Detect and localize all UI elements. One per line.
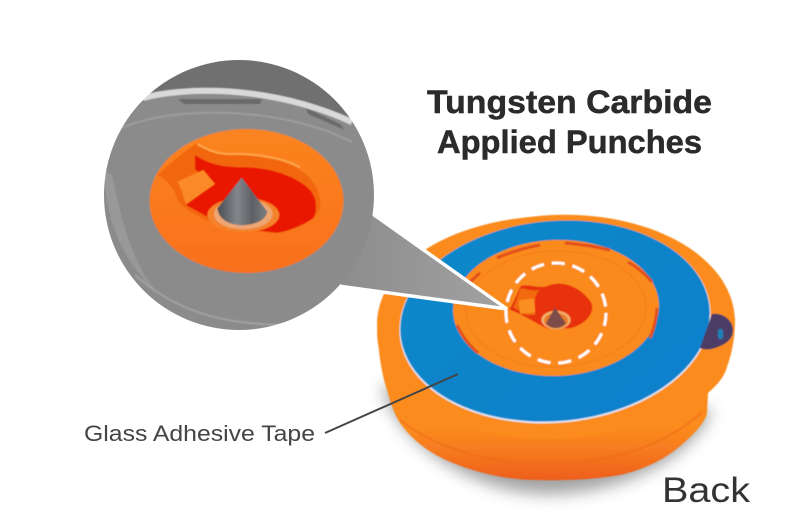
- top rim: [371, 206, 741, 448]
- tungsten carbide cone: [217, 178, 267, 225]
- red floor: [186, 155, 316, 233]
- label: back: Back: [662, 471, 751, 510]
- infographic canvas: [85, 60, 750, 504]
- disc body: [377, 216, 735, 480]
- small punch hole: [509, 284, 592, 329]
- magnified view circle: [104, 60, 374, 330]
- title: Tungsten Carbide: [427, 84, 712, 120]
- lower ridge: [135, 275, 290, 325]
- top lip highlight: [197, 144, 300, 167]
- grey background: [104, 93, 374, 330]
- disc drop shadow: [382, 385, 712, 494]
- dashed highlight circle: [506, 263, 606, 363]
- title: [427, 84, 712, 160]
- grey inner ridge: [122, 113, 352, 142]
- inner wall: [157, 143, 320, 233]
- seat ring: [207, 198, 279, 232]
- hub inner ring line: [464, 248, 648, 370]
- white highlight band: [143, 91, 352, 122]
- dark slot marks: [178, 99, 345, 130]
- photo contents: [104, 60, 374, 330]
- translucent dot on rim: [700, 314, 733, 349]
- light left edge: [105, 172, 152, 286]
- orange hub close up: [150, 129, 344, 273]
- title: Applied Punches: [437, 124, 702, 160]
- slot tab: [177, 170, 215, 204]
- hub opening: [157, 143, 320, 233]
- small blue window in dot: [718, 329, 723, 339]
- disc body and hub: [371, 206, 741, 480]
- glass adhesive tape ring: [391, 208, 719, 436]
- body groove lines: [400, 412, 702, 464]
- product photo: round punch disc: [371, 206, 741, 494]
- leader line: [325, 374, 458, 433]
- label: glass adhesive tape: Glass Adhesive Tape: [84, 421, 315, 446]
- callout wedge: [338, 212, 507, 309]
- hub red notches: [457, 243, 657, 353]
- dark top zone: [151, 60, 350, 118]
- inner orange hub: [451, 236, 661, 380]
